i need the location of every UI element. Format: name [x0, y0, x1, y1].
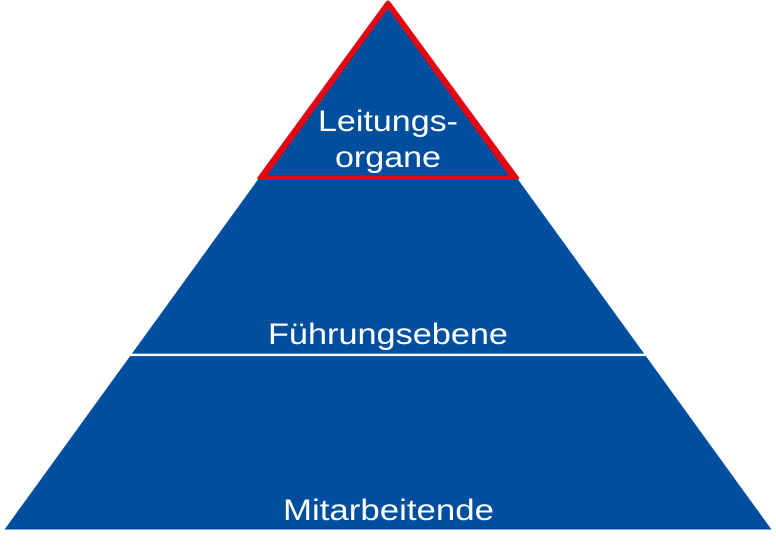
- label: Leitungsorgane: [318, 105, 458, 174]
- divider between Führungsebene and Mitarbeitende: [130, 354, 646, 356]
- label: Leitungsorgane: organe: [335, 141, 441, 174]
- top tier outline: Leitungsorgane: [257, 0, 520, 180]
- label: Leitungsorgane: Leitungs-: [318, 105, 458, 138]
- label: Führungsebene: Führungsebene: [268, 318, 508, 351]
- label: Mitarbeitende: Mitarbeitende: [283, 494, 494, 527]
